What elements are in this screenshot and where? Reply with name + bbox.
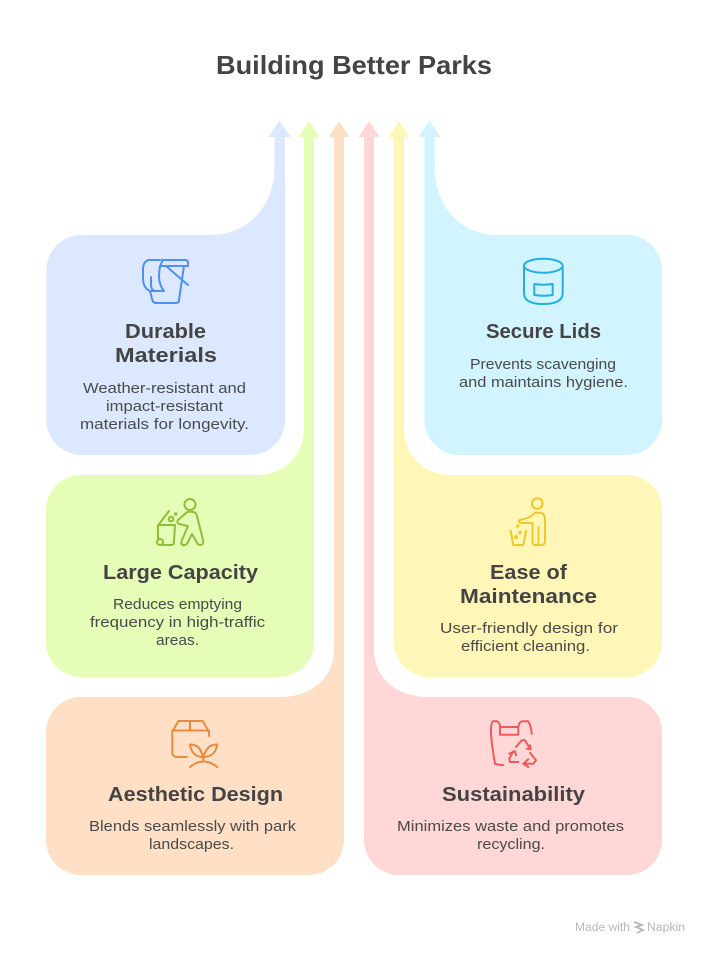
icon: person dropping litter in bin (511, 498, 545, 545)
arrow panel shape: orange (46, 121, 350, 875)
heading: ease of maintenance (460, 562, 597, 608)
text: durable materials description: materials for longevity. (80, 416, 249, 433)
text: durable materials description: Weather-resistant and (83, 380, 246, 397)
heading: durable materials (115, 321, 217, 367)
icon: bucket with cloth (143, 260, 188, 303)
heading: aesthetic design: Aesthetic Design (108, 784, 283, 806)
footer: made with napkin: Made with (575, 922, 630, 934)
text: large capacity description (90, 596, 266, 649)
panel: sustainability (358, 121, 662, 875)
arrow panel shape: red (358, 121, 662, 875)
text: ease of maintenance description: User-friendly design for (440, 620, 618, 637)
arrow panel shape: blue (46, 120, 290, 455)
heading: durable materials: Materials (115, 345, 217, 367)
text: large capacity description: areas. (156, 632, 199, 649)
icon: plastic bag with recycling symbol (491, 721, 536, 767)
text: sustainability description: recycling. (477, 836, 545, 853)
heading: ease of maintenance: Ease of (490, 562, 567, 584)
icon: person with wheelie bin (157, 499, 203, 545)
arrow panel shape: cyan (418, 120, 662, 455)
text: durable materials description: impact-resistant (106, 398, 224, 415)
icon: napkin logo (634, 922, 643, 933)
text: aesthetic design description: Blends seamlessly with park (89, 818, 297, 835)
heading: large capacity: Large Capacity (103, 562, 259, 584)
text: sustainability description (397, 818, 624, 853)
icon: box with sprout (172, 721, 217, 767)
footer: made with napkin: Napkin (647, 922, 685, 934)
arrow panel shape: yellow (388, 121, 662, 677)
arrow panel shape: green (46, 121, 320, 677)
icon: cylinder bin with lid (524, 259, 563, 304)
text: durable materials description (80, 380, 249, 433)
text: secure lids description (459, 356, 628, 391)
heading: secure lids: Secure Lids (486, 321, 601, 343)
text: ease of maintenance description: efficient cleaning. (461, 638, 590, 655)
text: ease of maintenance description (440, 620, 618, 655)
footer: made with napkin (575, 922, 685, 934)
text: large capacity description: Reduces emptying (113, 596, 242, 613)
panel: ease of maintenance (388, 121, 662, 677)
text: large capacity description: frequency in high-traffic (90, 614, 266, 631)
text: aesthetic design description: landscapes. (149, 836, 234, 853)
text: aesthetic design description (89, 818, 297, 853)
heading: ease of maintenance: Maintenance (460, 586, 597, 608)
panel: aesthetic design (46, 121, 350, 875)
heading: sustainability: Sustainability (442, 784, 586, 806)
panel: secure lids (418, 120, 662, 455)
text: sustainability description: Minimizes waste and promotes (397, 818, 624, 835)
text: secure lids description: and maintains hygiene. (459, 374, 628, 391)
panel: large capacity (46, 121, 320, 677)
panel: durable materials (46, 120, 290, 455)
text: secure lids description: Prevents scavenging (470, 356, 616, 373)
title: Building Better Parks (216, 50, 492, 80)
heading: durable materials: Durable (125, 321, 206, 343)
